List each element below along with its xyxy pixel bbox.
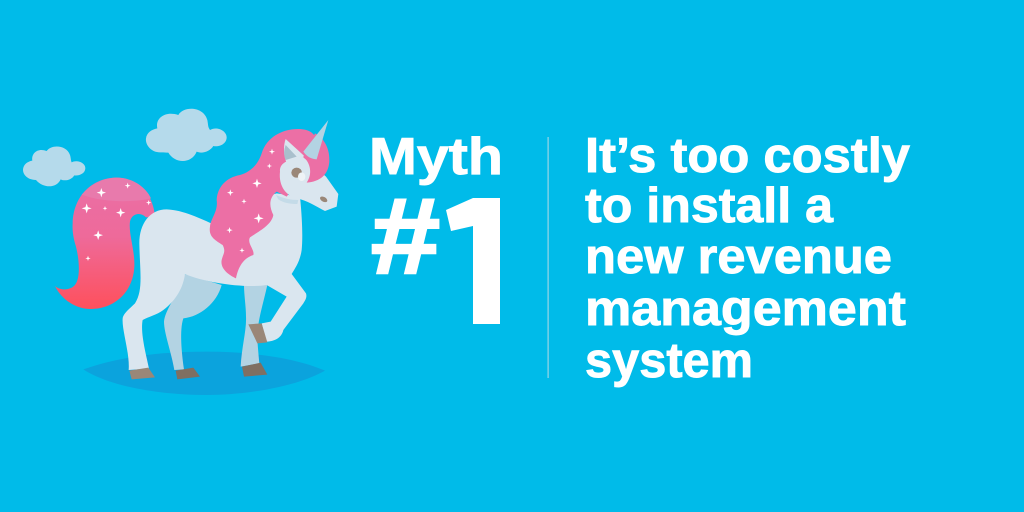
ear: [284, 139, 305, 163]
neck band: [276, 195, 298, 204]
sparkles: [82, 149, 275, 261]
forelock: [303, 133, 329, 183]
heading: #1: 1: [440, 167, 510, 361]
statement text: It’s too costly: [585, 129, 910, 183]
back legs: [164, 274, 222, 370]
illustration: unicorn with clouds: [23, 109, 338, 395]
tail highlight: [82, 178, 151, 201]
cloud left: [23, 146, 85, 186]
statement text: [585, 129, 910, 388]
head: [280, 157, 338, 211]
tail: [55, 178, 155, 309]
far front leg: [241, 285, 267, 367]
eye: [291, 168, 305, 181]
horn: [303, 120, 328, 159]
cloud right: [146, 109, 227, 161]
body: [123, 193, 306, 370]
divider: [548, 137, 549, 378]
statement text: management: [585, 282, 906, 336]
heading: Myth: Myth: [369, 128, 503, 186]
mane: [210, 129, 318, 278]
ground shadow: [83, 352, 325, 395]
statement text: new revenue: [585, 230, 892, 284]
heading: #1: #: [371, 175, 440, 296]
statement text: to install a: [585, 179, 834, 233]
hooves: [129, 323, 267, 379]
statement text: system: [585, 334, 753, 388]
nostril: [319, 195, 328, 203]
heading: #1: [372, 198, 500, 324]
